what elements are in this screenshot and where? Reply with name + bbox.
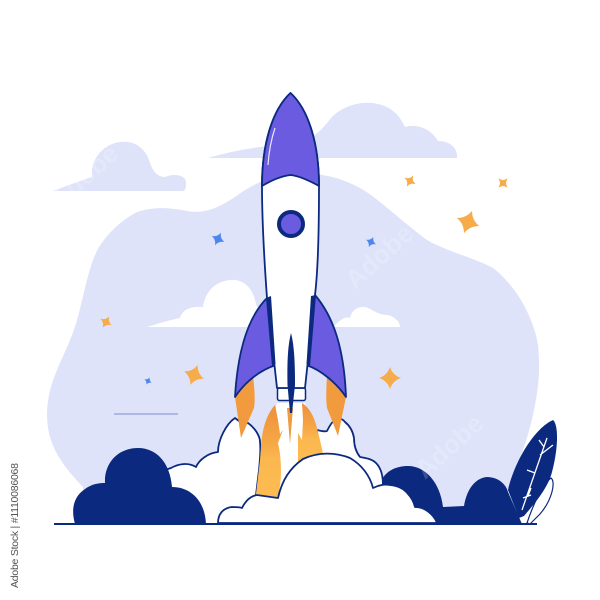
star: blue left of rocket — [209, 230, 227, 248]
cloud: front white — [218, 454, 437, 523]
cloud: white middle right — [333, 307, 400, 327]
star: orange near right fin — [379, 367, 401, 389]
star: orange far left — [97, 313, 115, 331]
engine nozzle — [278, 388, 306, 400]
porthole — [279, 212, 303, 236]
fin shadow: left — [266, 296, 276, 366]
flame: left side — [235, 376, 255, 438]
leaf: small white — [527, 478, 553, 524]
navy bushes right — [380, 466, 522, 524]
rocket — [235, 93, 346, 438]
navy cloud left — [73, 448, 206, 524]
watermark — [44, 138, 489, 484]
rocket flame: exhaust left — [256, 405, 283, 497]
star: orange large right — [453, 207, 483, 237]
fin shadow: right — [306, 295, 316, 366]
flame: right side — [326, 376, 346, 436]
ground line — [54, 523, 537, 525]
leaf: large navy — [508, 420, 557, 518]
cloud: back left white — [165, 418, 260, 524]
star: orange top right — [495, 175, 511, 191]
rocket body — [262, 93, 319, 388]
cloud: upper right — [208, 103, 457, 158]
rocket flame: exhaust right — [298, 403, 323, 464]
watermark: Adobe — [409, 408, 489, 484]
fin: left — [235, 298, 276, 397]
star: orange near left fin — [181, 362, 207, 388]
star: blue right of rocket — [364, 235, 378, 249]
nose highlight — [268, 128, 275, 165]
fin: right — [306, 295, 346, 397]
watermark: Adobe Stock — [339, 165, 478, 294]
leaf veins — [522, 438, 553, 510]
white exhaust core — [256, 403, 323, 510]
star: blue small — [143, 376, 153, 386]
watermark: Adobe — [44, 138, 124, 214]
cloud: white middle left — [147, 280, 262, 327]
star: orange top — [402, 173, 418, 189]
speed line — [114, 413, 178, 415]
cloud: back right white — [317, 419, 383, 524]
rocket flame: exhaust center — [287, 408, 293, 444]
background blob — [47, 174, 539, 512]
cloud: upper left — [53, 142, 186, 191]
stars — [97, 173, 511, 389]
center fin — [287, 333, 295, 413]
rocket nose — [262, 93, 319, 186]
stock id: Adobe Stock | #1110086068 — [9, 463, 21, 588]
